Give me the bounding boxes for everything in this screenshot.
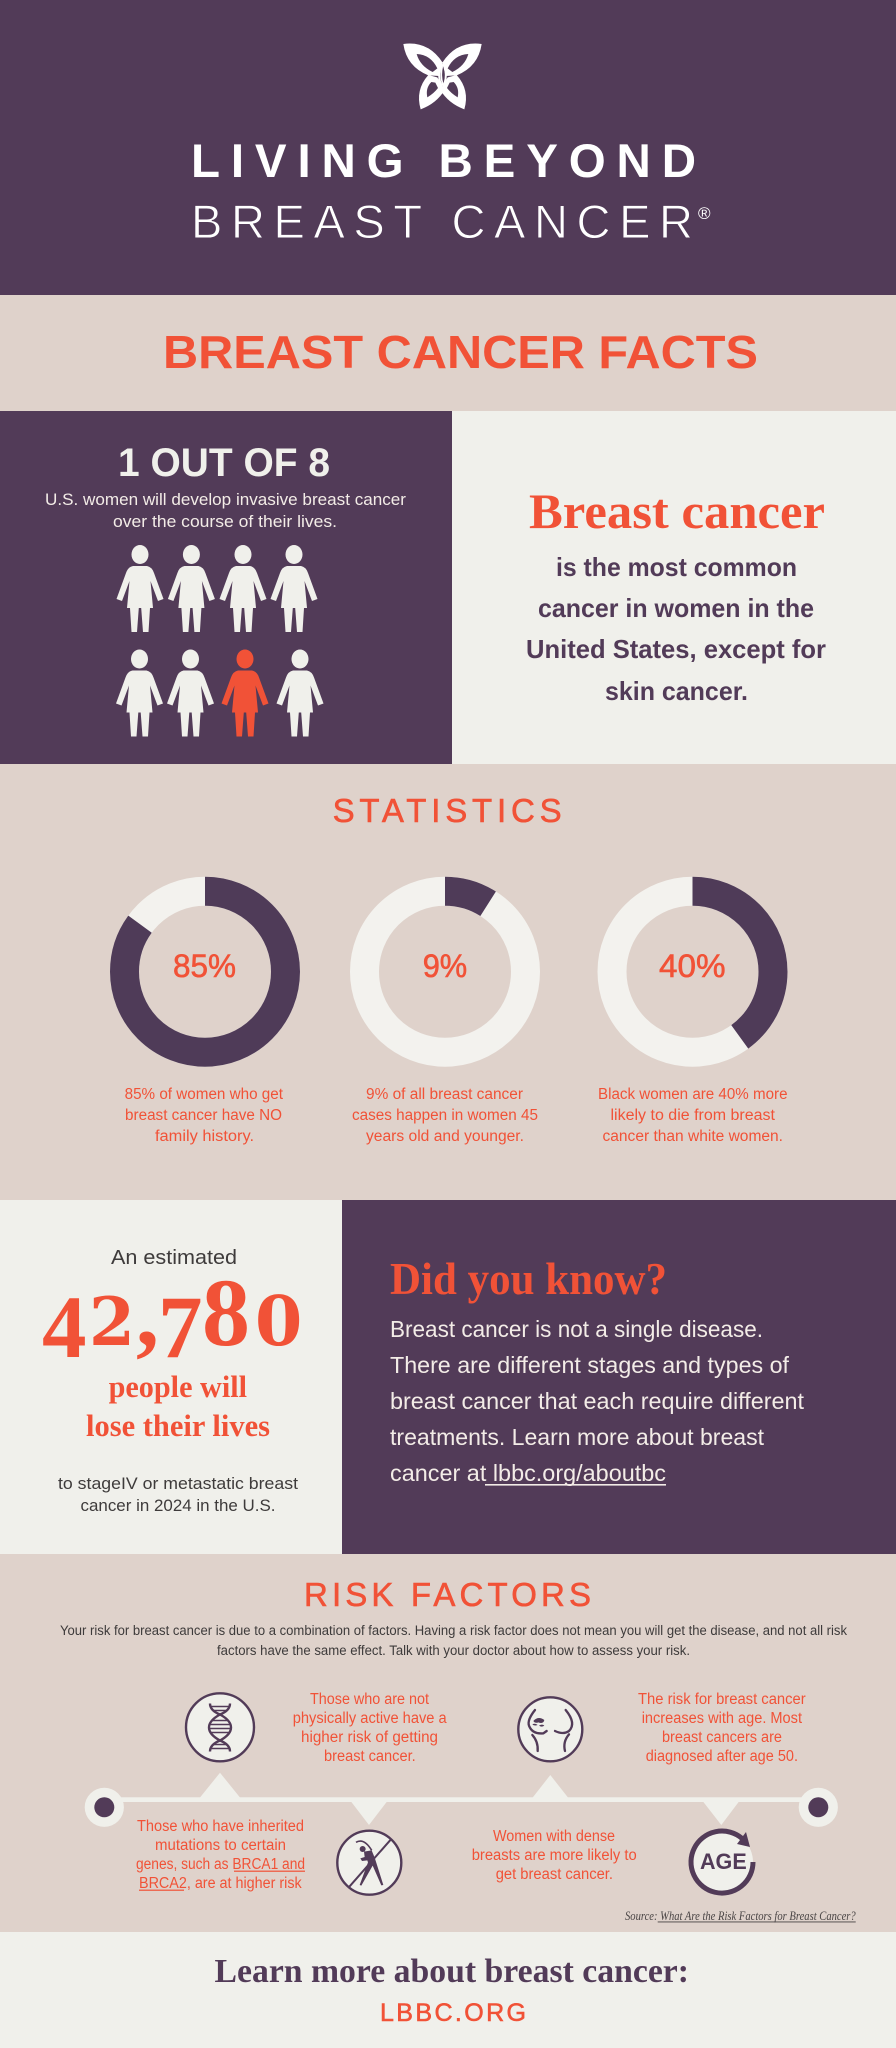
text: physically active: higher risk of getting <box>301 1729 438 1746</box>
text: dense breasts: breasts are more likely to <box>472 1847 637 1864</box>
text: physically active <box>293 1691 447 1765</box>
donut chart: 9%: 9% <box>423 948 467 984</box>
icon: no exercise <box>337 1831 401 1895</box>
panel: risk factors <box>0 1554 896 1932</box>
icon: butterfly logo <box>403 44 482 109</box>
text: age: breast cancers are <box>662 1729 782 1746</box>
panel: did you know <box>342 1200 896 1554</box>
donut chart: 9% <box>364 891 526 1052</box>
caption: 85% <box>125 1086 284 1145</box>
donut chart: 85%: 85% <box>173 948 236 984</box>
heading: breast cancer: Breast cancer <box>529 483 825 539</box>
body text: Breast cancer is not a single disease. <box>390 1316 763 1342</box>
caption: 40% <box>598 1086 788 1145</box>
caption: 85%: 85% of women who get <box>125 1086 284 1103</box>
text: dense breasts: get breast cancer. <box>496 1866 613 1883</box>
caption: 9% <box>352 1086 538 1145</box>
panel: title band <box>0 295 896 411</box>
panel: header <box>0 0 896 295</box>
body text: United States, except for <box>526 634 826 664</box>
icon: age: AGE <box>700 1849 747 1874</box>
footer link: LBBC.ORG <box>380 1999 526 2027</box>
text: inherited mutations <box>136 1818 305 1892</box>
donut chart: 40%: 40% <box>659 948 726 984</box>
big number: 42,780: , <box>136 1263 159 1365</box>
body text: There are different stages and types of <box>390 1352 790 1378</box>
panel: estimated deaths <box>0 1200 342 1554</box>
heading: risk factors: RISK FACTORS <box>304 1576 591 1613</box>
big number: 42,780: 4 <box>42 1279 86 1377</box>
big number: 42,780: 2 <box>89 1283 135 1361</box>
caption: 40%: Black women are 40% more <box>598 1086 788 1103</box>
panel: most common cancer <box>452 411 896 764</box>
text: age: The risk for breast cancer <box>638 1691 806 1708</box>
stat description: over the course of their lives. <box>113 512 337 531</box>
text: an estimated: An estimated <box>111 1247 237 1269</box>
body text <box>526 552 826 706</box>
text: physically active: Those who are not <box>310 1691 430 1708</box>
body text: cancer at lbbc.org/aboutbc <box>390 1460 666 1486</box>
heading: statistics: STATISTICS <box>333 792 562 829</box>
text: people will lose their lives: people will <box>109 1369 247 1404</box>
icon: dna <box>186 1693 254 1761</box>
panel: statistics <box>0 764 896 1200</box>
panel: footer <box>0 1932 896 2048</box>
body text <box>390 1316 805 1486</box>
donut chart: 85% <box>124 891 286 1052</box>
text: metastatic note <box>58 1474 298 1515</box>
caption: 40%: cancer than white women. <box>602 1128 783 1145</box>
text: dense breasts: Women with dense <box>493 1828 615 1845</box>
caption: 40%: likely to die from breast <box>610 1107 776 1124</box>
text: physically active: physically active have a <box>293 1710 447 1727</box>
text: metastatic note: to stageIV or metastatic breast <box>58 1474 298 1493</box>
stat description: U.S. women will develop invasive breast cancer <box>45 490 406 509</box>
big number: 42,780: 0 <box>255 1282 302 1362</box>
text: age <box>638 1691 806 1765</box>
body text: skin cancer. <box>605 676 748 706</box>
text: inherited mutations: BRCA2, are at higher risk <box>139 1875 302 1892</box>
text: age: diagnosed after age 50. <box>646 1748 798 1765</box>
intro text: factors have the same effect. Talk with your doctor about how to assess your risk. <box>217 1643 690 1658</box>
text: age: increases with age. Most <box>642 1710 803 1727</box>
big number: 42,780: 8 <box>202 1259 250 1366</box>
text: inherited mutations: genes, such as BRCA1 and <box>136 1856 305 1873</box>
text: dense breasts <box>472 1828 637 1883</box>
text: inherited mutations: Those who have inherited <box>137 1818 304 1835</box>
heading: breast cancer facts: BREAST CANCER FACTS <box>163 326 758 378</box>
caption: 85%: family history. <box>155 1128 254 1145</box>
caption: 9%: cases happen in women 45 <box>352 1107 538 1124</box>
logo wordmark: Breast Cancer: BREAST CANCER <box>191 195 693 248</box>
timeline with markers <box>85 1773 838 1827</box>
body text: breast cancer that each require different <box>390 1388 805 1414</box>
icon: age <box>691 1831 753 1893</box>
text: physically active: breast cancer. <box>324 1748 416 1765</box>
logo wordmark: Living Beyond: LIVING BEYOND <box>191 135 696 188</box>
body text: is the most common <box>556 552 797 582</box>
intro text: Your risk for breast cancer is due to a combination of factors. Having a risk factor does not mean you will get the disease, and not all risk <box>60 1623 847 1638</box>
text: people will lose their lives <box>86 1369 270 1443</box>
stat heading: 1 OUT OF 8 <box>118 441 330 485</box>
donut chart: 40% <box>612 891 773 1052</box>
body text: cancer in women in the <box>538 593 814 623</box>
text: metastatic note: cancer in 2024 in the U.S. <box>80 1496 276 1515</box>
pictogram: eight women, one highlighted <box>116 545 324 736</box>
footer heading: Learn more about breast cancer: <box>214 1953 689 1990</box>
caption: 85%: breast cancer have NO <box>125 1107 282 1124</box>
body text: treatments. Learn more about breast <box>390 1424 765 1450</box>
logo wordmark: Breast Cancer: ® <box>698 204 711 223</box>
heading: did you know: Did you know? <box>390 1254 667 1304</box>
text: inherited mutations: mutations to certain <box>155 1837 286 1854</box>
stat description <box>45 490 406 531</box>
text: people will lose their lives: lose their lives <box>86 1408 270 1443</box>
panel: 1 out of 8 <box>0 411 452 764</box>
icon: breast <box>518 1697 582 1761</box>
big number: 42,780: 7 <box>158 1279 202 1377</box>
intro text <box>60 1623 847 1658</box>
caption: 9%: years old and younger. <box>366 1128 524 1145</box>
caption: 9%: 9% of all breast cancer <box>366 1086 523 1103</box>
